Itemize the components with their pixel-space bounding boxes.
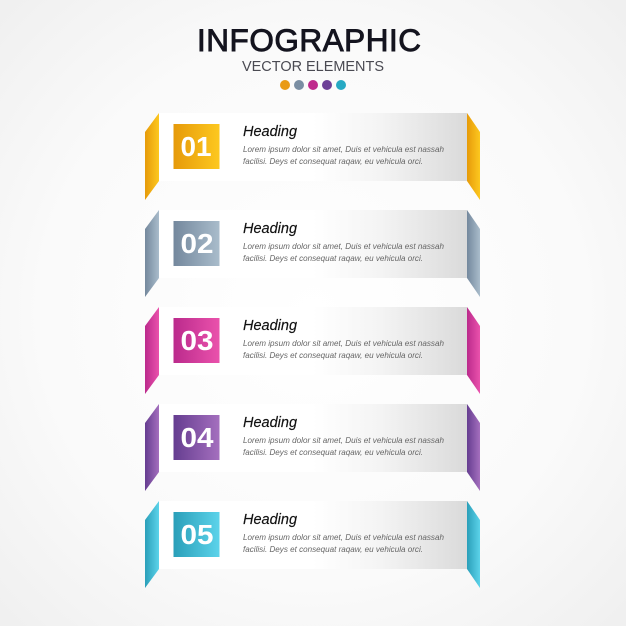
- panel: step 05: 05: [180, 519, 214, 550]
- panel: step 04: Heading: [243, 415, 297, 431]
- panel: step 03: 03: [180, 325, 214, 356]
- panel: step 02: facilisi. Deys et consequat raqaw, eu vehicula orci.: [243, 253, 423, 263]
- panel: step 03: Heading: [243, 318, 297, 334]
- panel: step 03: facilisi. Deys et consequat raqaw, eu vehicula orci.: [243, 350, 423, 360]
- panel: step 01: 01: [180, 131, 212, 162]
- panel: step 04: Lorem ipsum dolor sit amet, Duis et vehicula est nassah: [243, 435, 444, 445]
- panel: step 05: Heading: [243, 512, 297, 528]
- panel: step 02: Lorem ipsum dolor sit amet, Duis et vehicula est nassah: [243, 241, 444, 251]
- subtitle: VECTOR ELEMENTS: [242, 58, 384, 75]
- panel: step 04: [145, 404, 480, 491]
- panel: step 01: Heading: [243, 124, 297, 140]
- panel: step 01: facilisi. Deys et consequat raqaw, eu vehicula orci.: [243, 156, 423, 166]
- colour dots: [280, 80, 346, 90]
- panel: step 05: facilisi. Deys et consequat raqaw, eu vehicula orci.: [243, 544, 423, 554]
- panel: step 04: facilisi. Deys et consequat raqaw, eu vehicula orci.: [243, 447, 423, 457]
- title: INFOGRAPHIC: [197, 22, 421, 58]
- panel: step 05: [145, 501, 480, 588]
- panel: step 04: 04: [180, 422, 214, 453]
- panel: step 05: Lorem ipsum dolor sit amet, Duis et vehicula est nassah: [243, 532, 444, 542]
- panel: step 03: Lorem ipsum dolor sit amet, Duis et vehicula est nassah: [243, 338, 444, 348]
- panel: step 02: Heading: [243, 221, 297, 237]
- panel: step 01: [145, 113, 480, 200]
- panel: step 02: [145, 210, 480, 297]
- panel: step 03: [145, 307, 480, 394]
- panel: step 01: Lorem ipsum dolor sit amet, Duis et vehicula est nassah: [243, 144, 444, 154]
- panel: step 02: 02: [180, 228, 214, 259]
